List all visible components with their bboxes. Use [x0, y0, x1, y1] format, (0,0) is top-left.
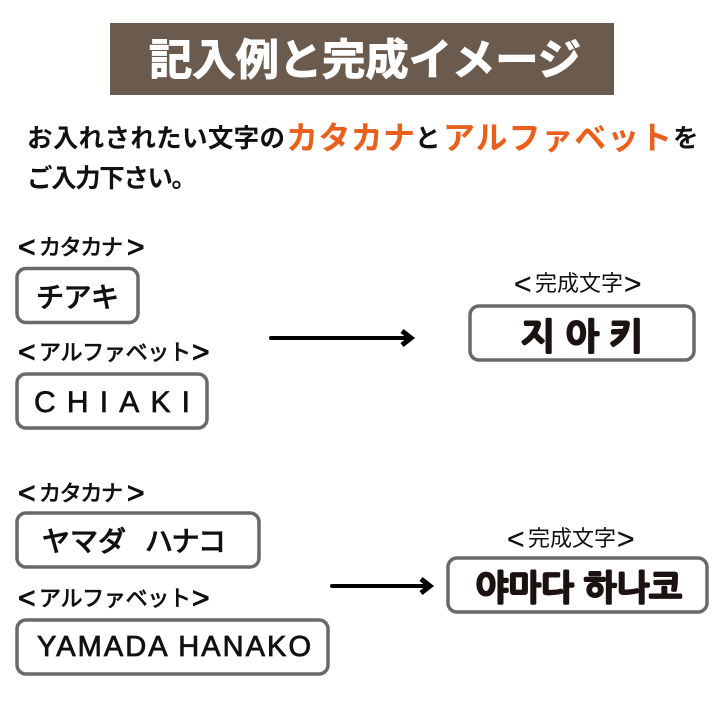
title banner	[110, 23, 614, 95]
example 2 result label: <	[507, 523, 525, 556]
example 2 alphabet input box: YAMADA HANAKO	[37, 631, 311, 663]
example 1 result box	[470, 306, 694, 360]
instruction text: アルファベット	[443, 120, 672, 156]
example 2 alphabet label	[18, 582, 210, 615]
instruction text	[27, 120, 699, 193]
example 1 alphabet label: <	[18, 336, 36, 369]
example 1 alphabet input box	[17, 374, 207, 428]
example 2 alphabet input box	[17, 620, 328, 674]
example 1 alphabet input box: CHIAKI	[34, 386, 190, 419]
example 1 katakana input box	[17, 268, 138, 322]
example 2 alphabet label: >	[192, 582, 210, 615]
example 1 alphabet label: >	[192, 336, 210, 369]
instruction text: と	[415, 125, 441, 153]
example 1 katakana label: カタカナ	[39, 235, 123, 260]
example 1 alphabet label: アルファベット	[39, 340, 191, 365]
example 2 katakana label: カタカナ	[39, 481, 123, 506]
example 1 katakana label	[18, 231, 145, 264]
example 2 katakana input box: ヤマダ	[42, 526, 126, 557]
example 2 katakana input box	[17, 513, 259, 567]
example 1 alphabet label	[18, 336, 210, 369]
example 2 result label: 完成文字	[528, 526, 616, 551]
example 2 katakana label: >	[127, 477, 145, 510]
instruction text: カタカナ	[286, 120, 415, 156]
instruction text: ご入力下さい。	[27, 164, 197, 193]
example 1 katakana label: <	[18, 231, 36, 264]
example 1 result label: 完成文字	[535, 271, 623, 296]
arrow: example 1	[271, 331, 411, 345]
example 1 katakana label: >	[127, 231, 145, 264]
example 2 alphabet label: <	[18, 582, 36, 615]
example 1 result label: >	[624, 268, 642, 301]
example 1 result box: 지 아 키	[521, 318, 643, 355]
example 2 katakana label: <	[18, 477, 36, 510]
example 2 result box: 야마다 하나코	[475, 570, 682, 606]
example 1 result label: <	[514, 268, 532, 301]
instruction text: お入れされたい文字の	[27, 125, 285, 153]
example 1 katakana input box: チアキ	[36, 282, 119, 313]
example 2 katakana label	[18, 477, 145, 510]
title banner: 記入例と完成イメージ	[149, 37, 581, 85]
example 2 result label	[507, 523, 635, 556]
instruction text: を	[673, 125, 699, 153]
example 2 katakana input box: ハナコ	[145, 526, 226, 557]
example 2 result box	[448, 558, 707, 612]
arrow: example 2	[332, 579, 430, 593]
example 2 result label: >	[617, 523, 635, 556]
example 2 alphabet label: アルファベット	[39, 586, 191, 611]
example 1 result label	[514, 268, 642, 301]
